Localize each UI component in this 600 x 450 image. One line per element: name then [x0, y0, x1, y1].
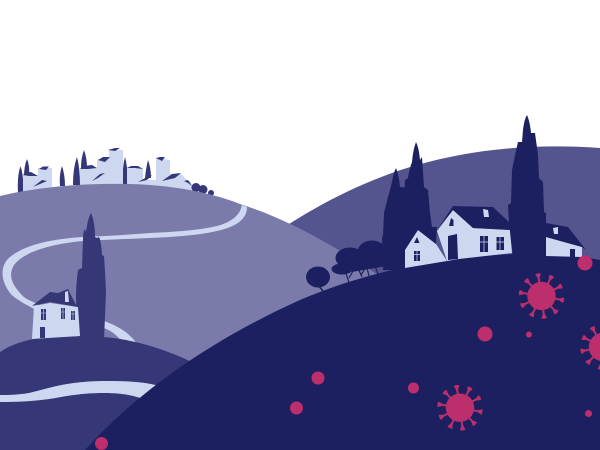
skylight	[483, 209, 489, 217]
right house wall	[546, 237, 582, 257]
main house wall	[437, 210, 512, 261]
roof valley	[418, 227, 437, 244]
distant village	[18, 148, 214, 196]
left cypress tree	[76, 213, 106, 340]
front left hill	[0, 336, 200, 450]
right house skylight	[553, 227, 558, 234]
right house window	[570, 249, 575, 257]
farmhouse roof	[32, 289, 78, 307]
dots	[95, 256, 592, 450]
left hill	[0, 184, 400, 450]
farmhouse chimney	[65, 291, 69, 302]
village building walls	[23, 150, 195, 192]
road on front left hill	[0, 381, 160, 402]
farmhouse window mullions	[41, 308, 75, 320]
small cypress tree	[382, 168, 410, 270]
winding road on left hill	[2, 205, 247, 344]
farmhouse wall	[32, 303, 80, 339]
right farmhouse	[546, 223, 586, 257]
virus 1	[518, 273, 565, 319]
window mullions	[414, 236, 504, 261]
village round trees	[191, 183, 214, 196]
tall cypress tree	[508, 115, 546, 258]
village roofs	[23, 148, 192, 187]
virus 3	[573, 317, 600, 377]
virus 2	[436, 385, 484, 431]
village cypress trees	[18, 150, 151, 193]
middle cypress tree	[398, 142, 432, 260]
round trees	[306, 240, 386, 291]
right house roof	[546, 223, 586, 250]
main farmhouse	[405, 206, 512, 268]
virus particles and dots	[95, 256, 600, 450]
side wing wall	[405, 230, 447, 268]
back right hill	[200, 146, 600, 450]
left farmhouse	[32, 289, 80, 339]
tree cluster	[332, 240, 386, 283]
dark foreground hill	[85, 254, 600, 450]
main house roof	[437, 206, 511, 230]
single round tree	[306, 266, 330, 291]
door and windows	[414, 218, 504, 261]
farmhouse windows and door	[40, 308, 75, 338]
